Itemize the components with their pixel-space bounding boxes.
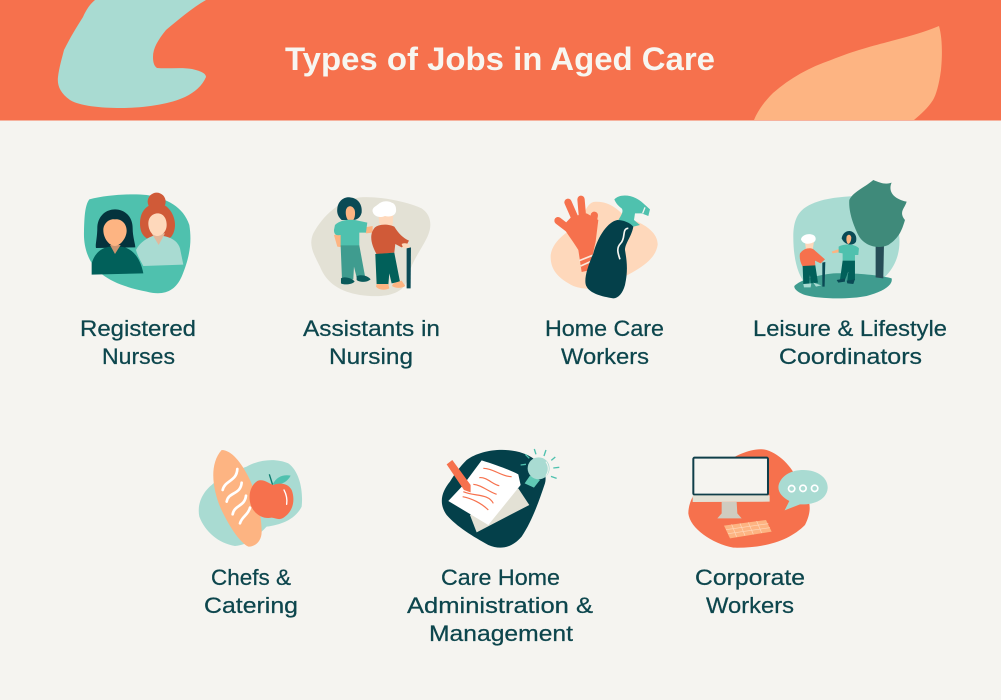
icon: home care workers (551, 195, 658, 298)
label: corporate workers: Corporate (695, 565, 805, 590)
glove (558, 199, 598, 272)
label: home care workers (545, 316, 664, 369)
label: chefs and catering: Chefs & (211, 565, 291, 590)
pencil (447, 460, 471, 492)
label: leisure and lifestyle coordinators: Coordinators (779, 344, 922, 369)
front paper (448, 460, 521, 525)
back paper (470, 488, 529, 532)
label: registered nurses: Nurses (102, 344, 175, 369)
tree (849, 180, 907, 278)
carer figure (832, 231, 859, 284)
carer (334, 197, 373, 284)
label: corporate workers (695, 565, 805, 618)
label: assistants in nursing (303, 316, 440, 369)
icon: registered nurses (84, 193, 190, 293)
label: care home administration and management (407, 565, 593, 646)
front nurse (92, 209, 143, 275)
elder figure (800, 234, 825, 287)
spray bottle (585, 195, 650, 298)
label: assistants in nursing: Assistants in (303, 316, 440, 341)
peach header leaf (754, 26, 942, 120)
elder (371, 201, 411, 290)
teal header blob (58, 0, 206, 108)
title: Types of Jobs in Aged Care (285, 41, 715, 77)
back nurse (136, 193, 183, 266)
icon: leisure and lifestyle coordinators (793, 180, 907, 298)
baguette (213, 450, 262, 547)
speech bubble (778, 470, 828, 510)
monitor (693, 458, 770, 518)
icon: care home administration and management (442, 449, 559, 548)
icon: corporate workers (688, 449, 828, 548)
label: corporate workers: Workers (706, 593, 794, 618)
label: home care workers: Workers (561, 344, 649, 369)
label: leisure and lifestyle coordinators (753, 316, 947, 369)
ground (794, 273, 892, 298)
header banner (0, 0, 1001, 120)
label: chefs and catering: Catering (204, 593, 298, 618)
label: leisure and lifestyle coordinators: Leisure & Lifestyle (753, 316, 947, 341)
label: care home administration and management: Care Home (441, 565, 560, 590)
label: care home administration and management: Management (429, 621, 573, 646)
label: assistants in nursing: Nursing (329, 344, 413, 369)
keyboard (724, 520, 772, 538)
apple (250, 474, 293, 519)
label: registered nurses (80, 316, 196, 369)
label: care home administration and management: Administration & (407, 593, 593, 618)
label: registered nurses: Registered (80, 316, 196, 341)
icon: assistants in nursing (311, 197, 430, 296)
icon: chefs and catering (199, 450, 302, 547)
light bulb (521, 449, 559, 488)
label: home care workers: Home Care (545, 316, 664, 341)
label: chefs and catering (204, 565, 298, 618)
